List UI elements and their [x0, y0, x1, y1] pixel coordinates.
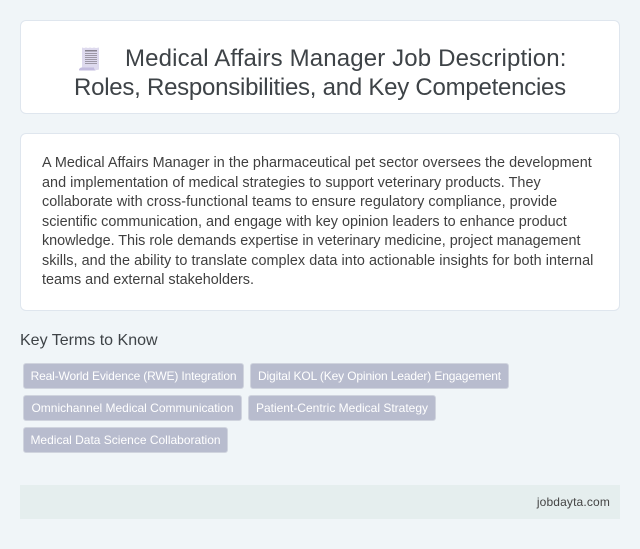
title line 1: Medical Affairs Manager Job Description:	[125, 45, 567, 72]
footer source: jobdayta.com	[537, 495, 610, 509]
tag: data science: Medical Data Science Collaboration	[30, 433, 221, 447]
tag: patient-centric: Patient-Centric Medical Strategy	[256, 401, 428, 415]
footer bar	[20, 485, 620, 519]
panel: title card	[20, 20, 620, 114]
tag: omnichannel	[23, 395, 242, 421]
description text: collaborate with cross-functional teams to ensure regulatory compliance, provide	[42, 194, 557, 210]
panel: description	[20, 133, 620, 311]
description text: A Medical Affairs Manager in the pharmaceutical pet sector oversees the development	[42, 155, 592, 171]
heading: key terms: Key Terms to Know	[20, 332, 158, 349]
description text	[42, 155, 593, 288]
tag: digital KOL	[250, 363, 509, 389]
title line 2: Roles, Responsibilities, and Key Competencies	[74, 74, 566, 101]
tag: data science	[23, 427, 228, 453]
description text: knowledge. This role demands expertise in veterinary medicine, project management	[42, 233, 580, 249]
key term tags	[23, 363, 509, 453]
tag: real-world evidence: Real-World Evidence (RWE) Integration	[31, 369, 236, 383]
tag: digital KOL: Digital KOL (Key Opinion Leader) Engagement	[258, 369, 501, 383]
description text: and implementation of medical strategies to support veterinary products. They	[42, 175, 541, 191]
tag: patient-centric	[248, 395, 436, 421]
tag: omnichannel: Omnichannel Medical Communication	[31, 401, 234, 415]
description text: skills, and the ability to translate complex data into actionable insights for both internal	[42, 253, 593, 269]
description text: teams and external stakeholders.	[42, 272, 254, 288]
description text: scientific communication, and engage with key opinion leaders to enhance product	[42, 214, 567, 230]
icon: document scroll	[79, 48, 99, 70]
tag: real-world evidence	[23, 363, 244, 389]
